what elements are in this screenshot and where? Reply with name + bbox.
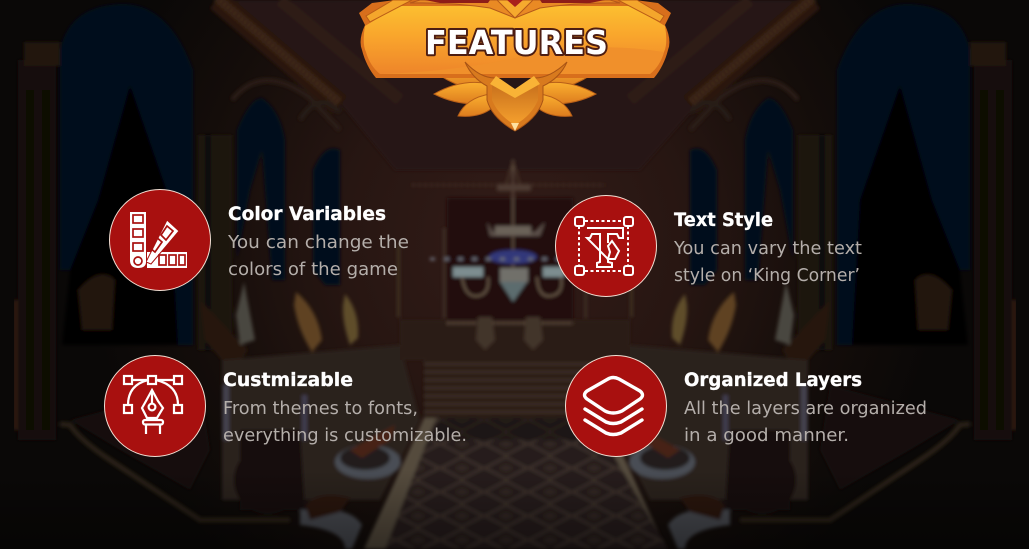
description: You can vary the text: [673, 239, 862, 259]
icon: vector pen tool: [104, 356, 206, 456]
feature: Color Variables: [110, 190, 409, 290]
feature: Organized Layers: [566, 356, 927, 456]
icon: layer stack: [566, 356, 666, 456]
description: You can change the: [227, 233, 409, 253]
heading: Color Variables: [228, 203, 386, 225]
banner: gold FEATURES plaque: [359, 0, 671, 131]
heading: Organized Layers: [684, 369, 862, 391]
heading: Custmizable: [223, 369, 353, 391]
icon: colour swatches: [110, 190, 210, 290]
banner title: FEATURES: [425, 23, 608, 62]
description: style on ‘King Corner’: [674, 266, 860, 286]
description: everything is customizable.: [223, 426, 467, 446]
feature: Custmizable: [104, 356, 467, 456]
description: All the layers are organized: [684, 399, 927, 419]
banner leaves: [425, 63, 605, 116]
icon: text cursor frame: [556, 196, 656, 296]
banner shield: [465, 62, 567, 131]
banner plaque: [359, 0, 671, 78]
description: in a good manner.: [684, 426, 849, 446]
heading: Text Style: [674, 209, 773, 231]
feature: Text Style: [556, 196, 862, 296]
description: colors of the game: [228, 260, 398, 280]
description: From themes to fonts,: [223, 399, 418, 419]
